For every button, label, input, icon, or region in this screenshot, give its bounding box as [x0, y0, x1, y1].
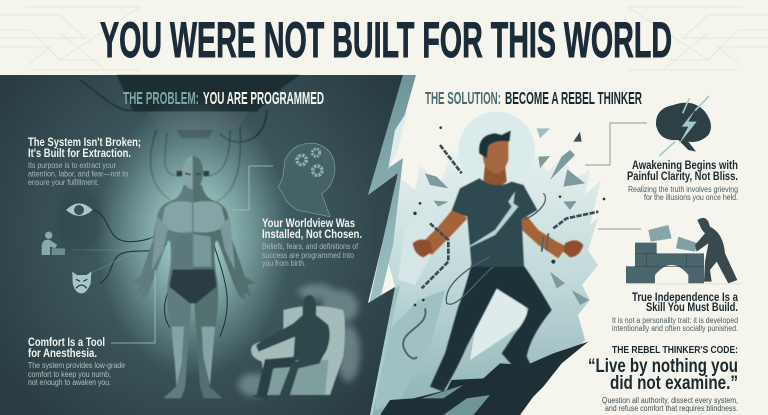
icon: eye	[56, 187, 103, 253]
illustration: machine and cables overhead	[80, 75, 300, 202]
text block: awakening: Painful Clarity, Not Bliss.	[627, 171, 738, 183]
text block: comfort as anesthesia: comfort to keep you numb,	[28, 370, 111, 379]
text block: system built for extraction	[28, 137, 141, 187]
icon: person building with blocks	[626, 218, 741, 284]
text block: system built for extraction: The System Isn't Broken;	[28, 137, 141, 149]
text block: comfort as anesthesia: for Anesthesia.	[28, 348, 97, 360]
connector: comfort to figure	[111, 270, 155, 343]
shirt	[452, 178, 537, 267]
text block: worldview installed: you from birth.	[262, 259, 306, 268]
text block: comfort as anesthesia: Comfort Is a Tool	[28, 337, 105, 349]
text block: true independence: It is not a personality trait: it is developed	[612, 316, 738, 325]
connector: brain to chains	[585, 123, 647, 165]
text block: true independence: intentionally and often socially punished.	[612, 324, 738, 333]
heading: the problem: YOU ARE PROGRAMMED	[203, 88, 324, 108]
text block: worldview installed: Beliefs, fears, and definitions of	[262, 242, 359, 251]
illustration: programmed human figure	[72, 97, 290, 398]
callout: the rebel thinker's code: Question all authority, dissect every system,	[602, 396, 738, 405]
connector: chains to builder	[598, 228, 641, 230]
illustration: rebel thinker breaking chains	[380, 112, 605, 415]
text block: worldview installed: Installed, Not Chosen.	[262, 229, 362, 241]
text block: comfort as anesthesia	[28, 337, 125, 387]
panel: the solution background	[345, 75, 601, 415]
text block: true independence: Skill You Must Build.	[646, 302, 738, 314]
icon: head with gears	[278, 143, 335, 217]
callout: the rebel thinker's code: THE REBEL THINKER'S CODE:	[612, 344, 738, 356]
text block: worldview installed	[262, 218, 362, 268]
illustration: man in armchair with smoke	[238, 284, 360, 402]
text block: worldview installed: success are programmed into	[262, 251, 354, 260]
icon: worker at desk	[42, 232, 65, 255]
neck and head	[483, 165, 507, 190]
text block: awakening: for the illusions you once held.	[644, 193, 738, 202]
text block: true independence: True Independence Is a	[632, 292, 738, 304]
text block: true independence	[612, 292, 738, 333]
heading: the solution: THE SOLUTION:	[425, 88, 501, 108]
icon: brain with lightning	[656, 96, 711, 156]
rock	[380, 342, 588, 415]
icon: sad devil mask	[72, 272, 91, 293]
text block: system built for extraction: It's Built for Extraction.	[28, 148, 131, 160]
callout: the rebel thinker's code: and refuse comfort that requires blindness.	[605, 404, 738, 413]
arms	[422, 207, 567, 258]
heading: the problem: THE PROBLEM:	[123, 88, 199, 108]
panel: the problem background	[0, 75, 403, 415]
text block: comfort as anesthesia: The system provides low-grade	[28, 361, 125, 370]
callout: the rebel thinker's code	[588, 344, 738, 413]
text block: system built for extraction: attention, labor, and fear—not to	[28, 170, 128, 178]
text block: awakening: Awakening Begins with	[632, 160, 738, 172]
text block: awakening	[627, 160, 738, 202]
heading: the solution	[425, 88, 642, 108]
text block: worldview installed: Your Worldview Was	[262, 218, 355, 230]
text block: system built for extraction: Its purpose is to extract your	[28, 161, 116, 170]
heading: the solution: BECOME A REBEL THINKER	[505, 88, 642, 108]
text block: awakening: Realizing the truth involves grieving	[628, 185, 738, 194]
text block: system built for extraction: ensure your fulfillment.	[28, 178, 99, 187]
connector: figure to worldview	[232, 166, 273, 210]
rear and front legs	[430, 263, 552, 392]
chains	[422, 145, 598, 288]
text block: comfort as anesthesia: not enough to awaken you.	[28, 378, 111, 387]
shards	[425, 128, 589, 305]
heading: the problem	[123, 88, 324, 108]
